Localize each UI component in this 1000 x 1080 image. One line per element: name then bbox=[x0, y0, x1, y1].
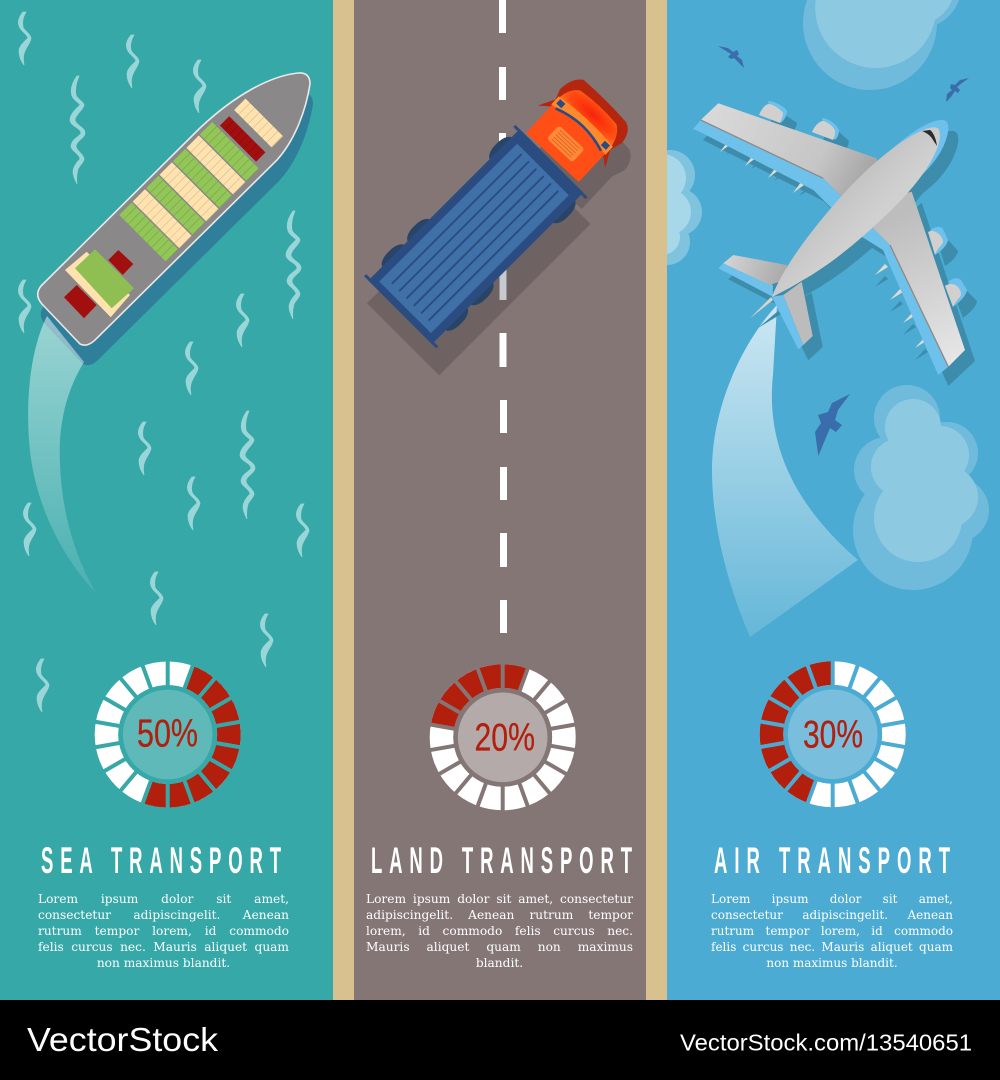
dash seen through truck shadow bbox=[500, 267, 506, 300]
heading: sea transport: SEA TRANSPORT bbox=[41, 841, 281, 882]
truck shadow bbox=[367, 99, 639, 375]
footer: watermark bar: VectorStock bbox=[27, 1021, 219, 1058]
text block: air: rutrum tempor lorem, id commodo bbox=[711, 924, 953, 938]
text block: sea: Lorem ipsum dolor sit amet, bbox=[38, 892, 289, 906]
text block: sea: consectetur adipiscingelit. Aenean bbox=[38, 908, 289, 922]
donut chart 50% bbox=[89, 656, 246, 813]
heading: land transport: LAND TRANSPORT bbox=[371, 841, 632, 882]
plane contrail bbox=[712, 305, 858, 637]
bridge superstructure bbox=[64, 249, 134, 318]
ship wake bbox=[28, 316, 96, 593]
donut chart 20%: 20% bbox=[474, 717, 535, 760]
text block: air: consectetur adipiscingelit. Aenean bbox=[711, 908, 953, 922]
donut chart 30%: 30% bbox=[803, 714, 863, 757]
text block: air: felis curcus nec. Mauris aliquet quam bbox=[711, 940, 953, 954]
text block: land: adipiscingelit. Aenean rutrum tempor bbox=[366, 908, 633, 922]
wing: lower bbox=[862, 192, 965, 375]
ship bbox=[38, 73, 310, 345]
road surface bbox=[354, 0, 646, 1000]
road centre dashes bbox=[499, 0, 507, 633]
trailer bbox=[364, 125, 588, 348]
heading: air transport: AIR TRANSPORT bbox=[714, 841, 950, 882]
fuselage bbox=[772, 127, 940, 297]
cockpit halo bbox=[885, 120, 948, 182]
cockpit windows bbox=[922, 130, 937, 146]
text block: land: lorem, id commodo felis curcus nec. bbox=[366, 924, 633, 938]
cloud: top bbox=[803, 0, 961, 90]
text block: land: Lorem ipsum dolor sit amet, consectetur bbox=[366, 892, 633, 906]
engines bbox=[759, 101, 967, 307]
footer: watermark bar bbox=[0, 1000, 1000, 1080]
panel: land transport bbox=[333, 0, 667, 1000]
birds bbox=[718, 46, 969, 456]
donut chart 50%: 50% bbox=[137, 713, 198, 756]
text block: sea: felis curcus nec. Mauris aliquet quam bbox=[38, 940, 289, 954]
wing: upper bbox=[693, 103, 880, 208]
donut chart 30% bbox=[754, 656, 911, 813]
truck bbox=[364, 69, 639, 348]
panel: sea transport bbox=[0, 0, 333, 1000]
ship shadow bbox=[41, 93, 313, 365]
plane bbox=[693, 101, 967, 375]
text block: air bbox=[711, 892, 953, 970]
text block: air: Lorem ipsum dolor sit amet, bbox=[711, 892, 953, 906]
panel: air transport bbox=[667, 0, 1000, 1000]
truck cab bbox=[519, 69, 639, 189]
plane shadow bbox=[703, 113, 977, 386]
text block: air: non maximus blandit. bbox=[766, 956, 898, 970]
donut chart 20% bbox=[429, 662, 577, 812]
cargo containers bbox=[125, 99, 282, 256]
waves bbox=[18, 12, 309, 712]
footer: watermark bar: VectorStock.com/13540651 bbox=[680, 1030, 972, 1056]
text block: sea: rutrum tempor lorem, id commodo bbox=[38, 924, 289, 938]
text block: sea bbox=[38, 892, 289, 970]
cab grille bbox=[547, 125, 585, 162]
cloud: lower right bbox=[853, 385, 989, 590]
text block: land: Mauris aliquet quam non maximus bbox=[366, 940, 633, 954]
text block: sea: non maximus blandit. bbox=[97, 956, 230, 970]
tail stabilizers bbox=[718, 255, 813, 349]
text block: land bbox=[366, 892, 633, 970]
text block: land: blandit. bbox=[476, 956, 523, 970]
cloud: left bbox=[638, 150, 702, 265]
wing spikes bbox=[720, 141, 928, 348]
